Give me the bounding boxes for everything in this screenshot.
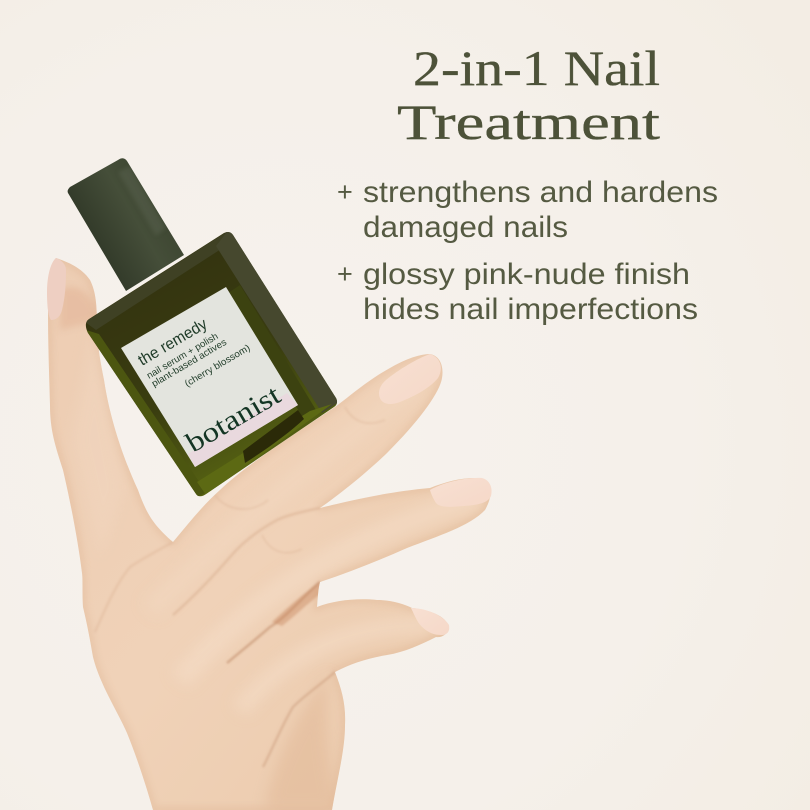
label text: cherry blossom: (cherry blossom) [183, 343, 252, 390]
hand silhouette [48, 258, 491, 810]
nail polish bottle [68, 158, 345, 505]
benefit 1: strengthens and hardens [363, 176, 718, 209]
title: 2-in-1 Nail [413, 40, 660, 96]
top rim [85, 231, 235, 330]
label text: nail serum: nail serum + polish [145, 331, 220, 382]
title [397, 40, 660, 150]
glass body [86, 232, 338, 496]
nail: middle finger [430, 478, 492, 507]
label paper [121, 287, 298, 467]
hand holding the bottle [47, 258, 492, 810]
benefit 2: glossy pink-nude finish [363, 258, 690, 291]
title: Treatment [397, 94, 660, 150]
left edge [86, 330, 206, 497]
inner right liquid [228, 285, 316, 418]
cap highlight [121, 168, 164, 232]
label [121, 287, 298, 467]
label text: product name: the remedy [135, 316, 210, 369]
label text: brand: botanist [181, 379, 286, 459]
benefit 1: + [337, 177, 353, 207]
pink strip [188, 393, 298, 467]
right side wall of the glass [216, 228, 342, 413]
infographic canvas [47, 50, 717, 810]
nail: pinky [47, 258, 66, 320]
benefit 2 [337, 258, 698, 326]
nail: ring finger [411, 608, 449, 635]
benefit 2: hides nail imperfections [363, 293, 698, 326]
bottle cap [68, 158, 184, 291]
bottom glass edge [197, 404, 332, 495]
base liquid shadow [243, 410, 304, 463]
label text: actives: plant-based actives [150, 337, 229, 390]
hand shading and finger creases [48, 258, 491, 810]
nail: index finger [379, 354, 441, 404]
benefit 1 [337, 176, 718, 244]
benefit 2: + [337, 259, 353, 289]
benefit 1: damaged nails [363, 211, 568, 244]
